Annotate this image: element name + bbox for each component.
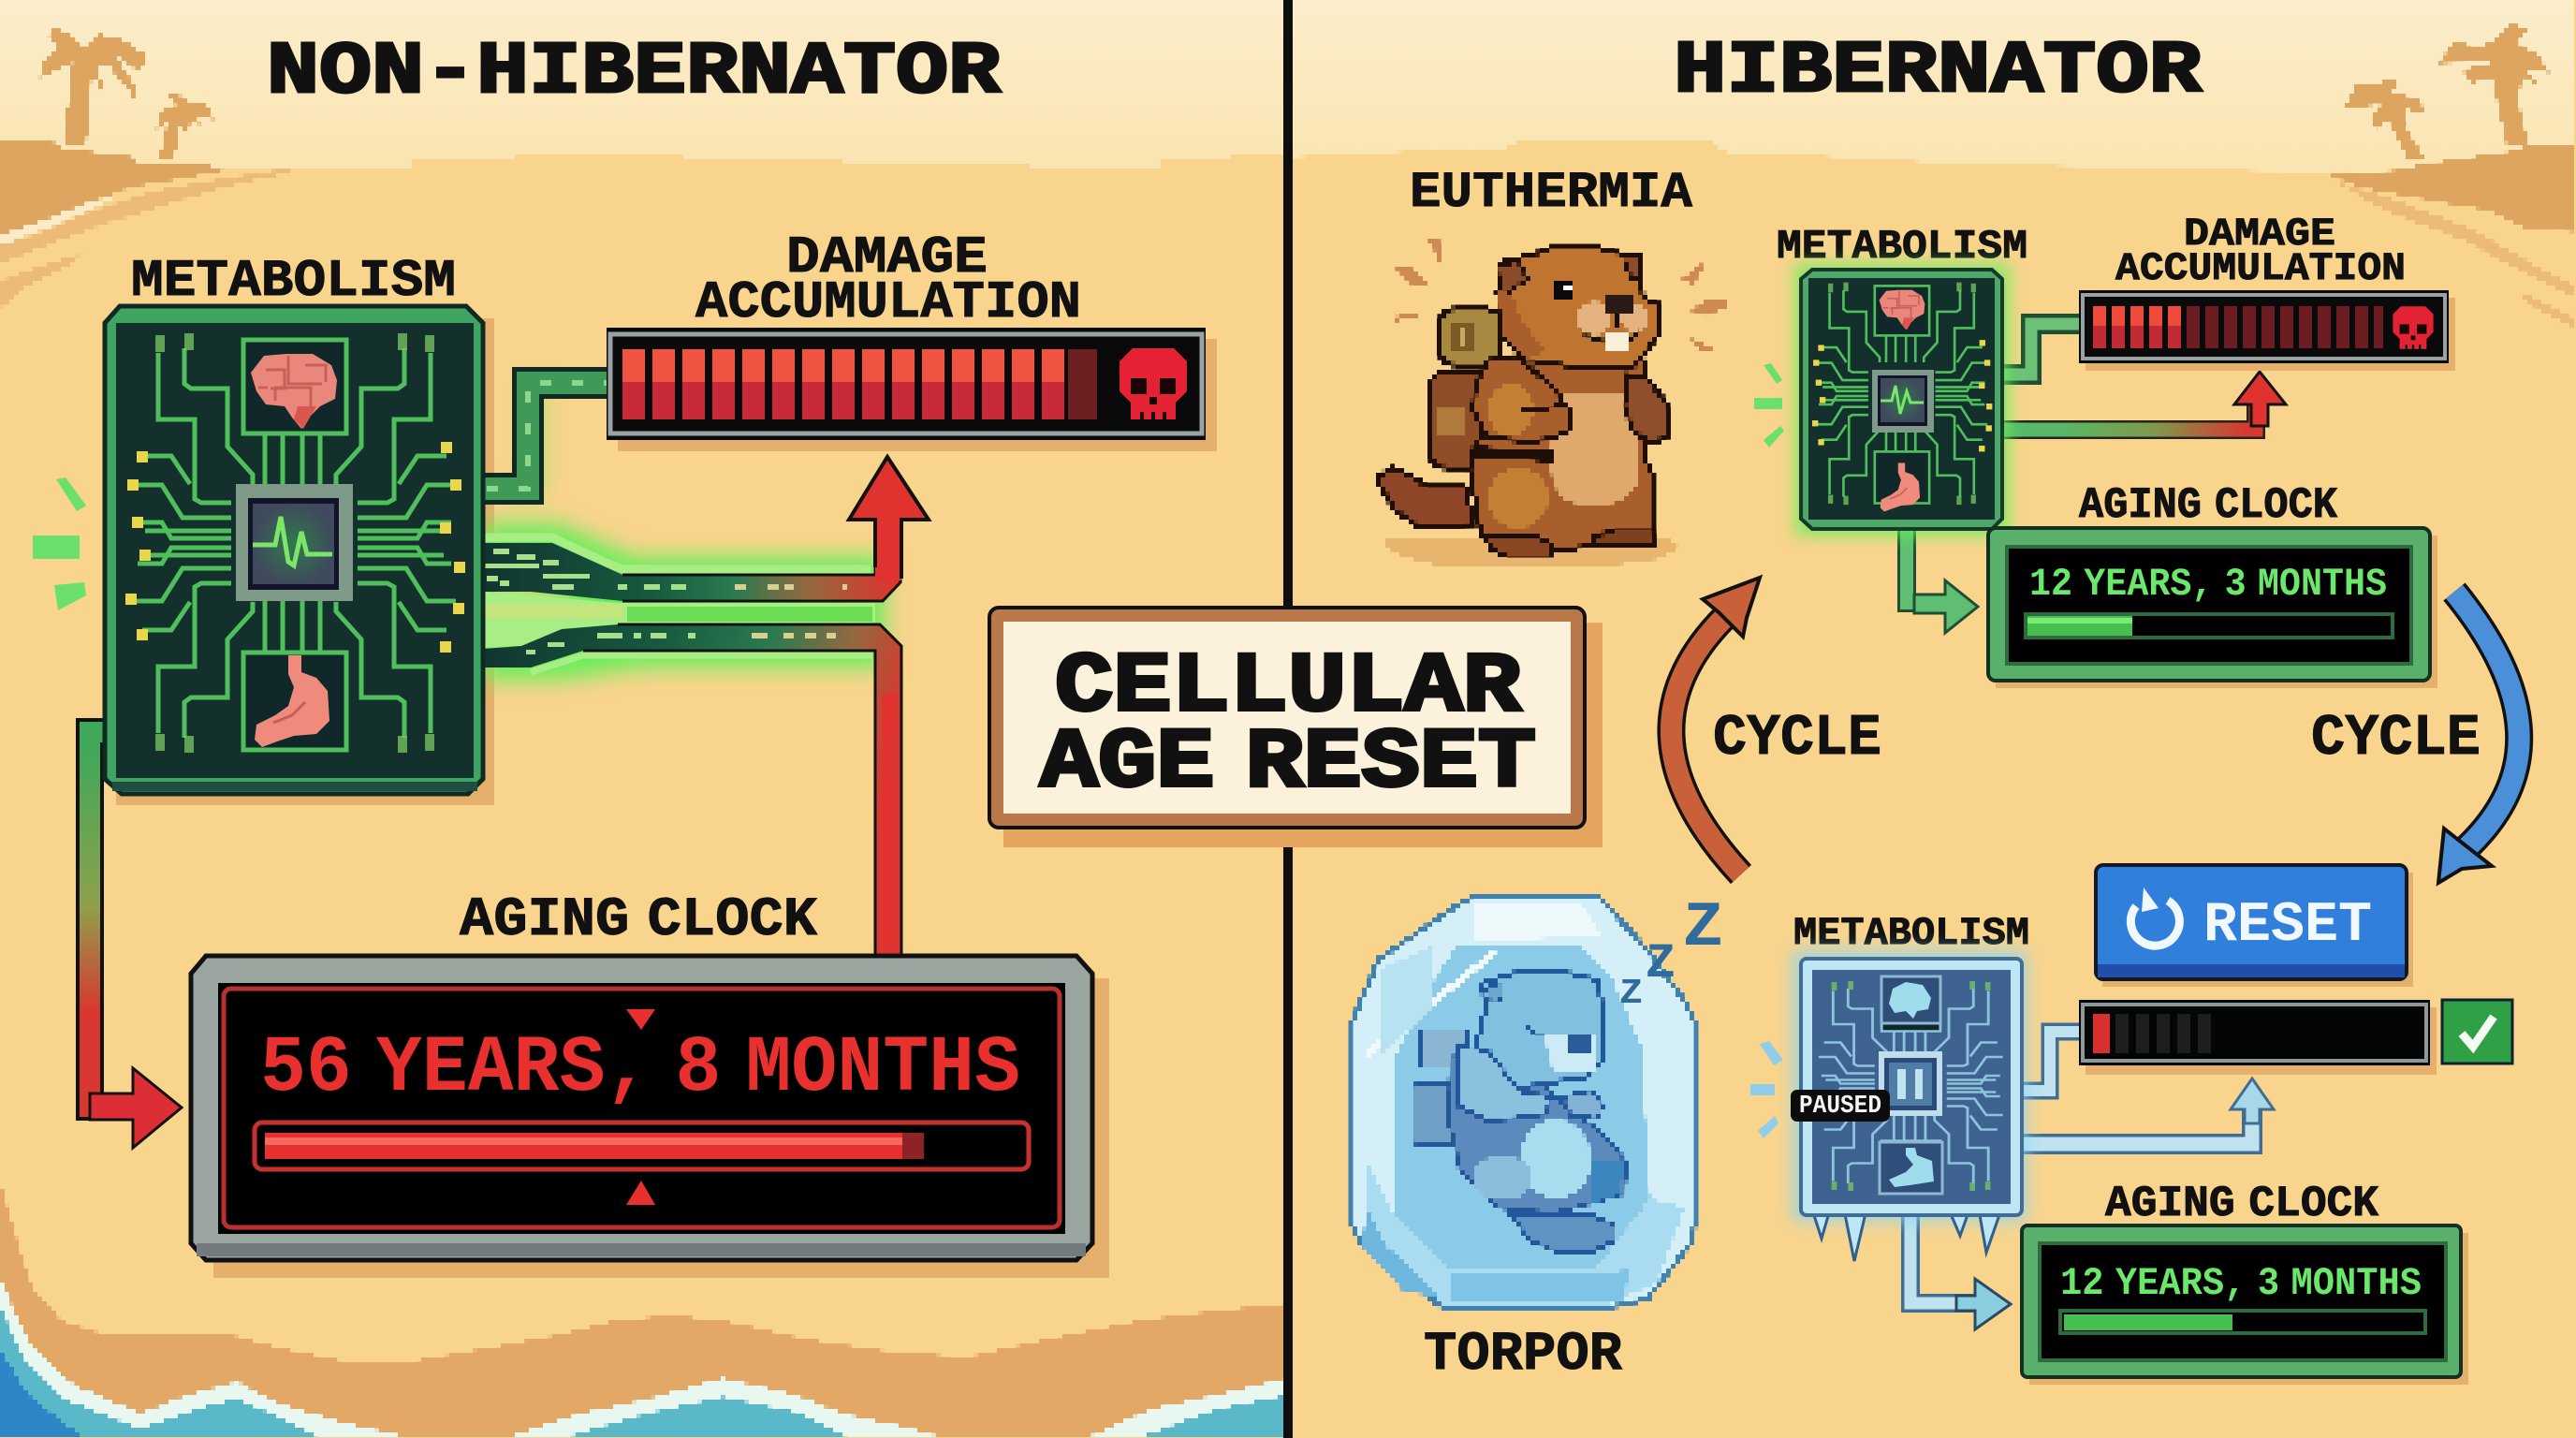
icon: brain — [251, 354, 337, 429]
label: torpor: TORPOR — [1424, 1325, 1622, 1386]
paused badge: PAUSED — [1799, 1093, 1881, 1121]
frozen backpack — [1421, 1030, 1466, 1067]
arrow: frozen metabolism flow to damage — [2012, 1078, 2274, 1144]
damage segments — [622, 349, 1064, 419]
icon: frozen stomach — [1889, 1148, 1934, 1187]
icon: stomach — [255, 655, 329, 747]
progress bar — [2060, 1311, 2425, 1333]
icicles — [1812, 1210, 2001, 1261]
panel: aging clock right top — [1988, 528, 2437, 688]
flow dashes — [483, 549, 686, 590]
arrow: right metabolism to aging clock — [1907, 529, 1978, 633]
label: aging clock right top: AGING CLOCK — [2079, 481, 2337, 530]
action ticks — [1397, 237, 1725, 353]
flow dashes — [526, 633, 695, 654]
marker triangles — [626, 1009, 655, 1205]
damage level — [2093, 1014, 2110, 1053]
arrow: metabolism to damage pipe — [483, 383, 607, 489]
callout: cellular age reset — [989, 608, 1603, 847]
arrow: frozen metabolism to aging clock — [1910, 1215, 2011, 1329]
muzzle — [1577, 301, 1611, 335]
icon: sleeping z letters: Z — [1646, 936, 1676, 991]
arrow: glow flows left — [483, 384, 885, 651]
progress bar — [255, 1123, 1029, 1169]
panel: damage bar right — [2079, 290, 2455, 371]
callout: cellular age reset: AGE RESET — [1040, 716, 1536, 812]
belly — [1550, 391, 1640, 506]
cpu chip — [236, 484, 353, 601]
heading: hibernator: HIBERNATOR — [1674, 29, 2203, 113]
panel: frozen metabolism board — [1750, 950, 2027, 1261]
feet — [1484, 536, 1550, 557]
arrow: metabolism pipe to aging clock left — [90, 732, 182, 1148]
arrow: right metabolism to damage pipe — [1998, 324, 2079, 374]
board shadow left — [116, 318, 494, 805]
frost ticks — [1750, 1041, 1783, 1138]
icon: frozen brain — [1889, 982, 1931, 1019]
label: aging clock right bottom: AGING CLOCK — [2105, 1180, 2378, 1228]
frozen paw — [1561, 1091, 1603, 1119]
bedroll — [1440, 309, 1501, 365]
label: cycle right: CYCLE — [2311, 705, 2481, 771]
icon: stomach — [1881, 463, 1920, 511]
label: damage accumulation left: ACCUMULATION — [695, 272, 1081, 332]
label: damage accumulation right: DAMAGE — [2184, 212, 2335, 257]
torso — [1470, 360, 1652, 554]
ice block — [1353, 897, 1694, 1309]
label: euthermia: EUTHERMIA — [1410, 165, 1693, 222]
heading: non-hibernator: NON-HIBERNATOR — [267, 30, 1002, 114]
label: damage accumulation right: ACCUMULATION — [2115, 246, 2406, 291]
cpu chip — [1872, 370, 1934, 433]
arrow: cycle up orange — [1671, 578, 1760, 874]
arrow: metabolism flow up to damage — [483, 457, 929, 601]
panel: metabolism board right — [1754, 264, 2009, 536]
circuit traces — [1812, 286, 1992, 504]
label: metabolism right bottom: METABOLISM — [1793, 911, 2029, 956]
panel: metabolism board left — [33, 306, 483, 794]
icon: green check — [2442, 1000, 2512, 1064]
icon: brain — [1880, 290, 1925, 330]
tail — [1376, 468, 1474, 526]
frozen circuit — [1819, 985, 2003, 1189]
frozen body — [1449, 1044, 1626, 1213]
damage segments — [2093, 306, 2181, 348]
pulse ticks — [1754, 363, 1784, 448]
icon: reset arrow — [2130, 888, 2179, 946]
right ear — [1622, 255, 1642, 279]
circuit nodes — [125, 442, 465, 653]
icon: skull — [1120, 348, 1187, 419]
empty segments — [2115, 1014, 2211, 1053]
icon: beaver frozen in ice — [1339, 885, 1713, 1320]
label: metabolism right top: METABOLISM — [1777, 224, 2027, 271]
arrow: frozen metabolism to damage pipe — [2012, 1032, 2079, 1091]
scene: left island with palms — [0, 28, 300, 309]
progress bar — [2026, 614, 2393, 638]
backpack — [1429, 372, 1486, 468]
circuit traces — [133, 340, 456, 750]
panel: aging clock right bottom — [2022, 1225, 2468, 1385]
head — [1498, 248, 1659, 367]
scene: left sky — [0, 0, 1288, 170]
button: reset — [2096, 865, 2413, 987]
label: metabolism left: METABOLISM — [131, 251, 456, 311]
clock reading: 12 YEARS, 3 MONTHS — [2029, 562, 2387, 607]
scene: right island with palms — [2327, 22, 2576, 330]
label: damage accumulation left: DAMAGE — [786, 227, 988, 287]
icon: beaver euthermia — [1357, 225, 1741, 580]
button label: RESET — [2203, 894, 2372, 958]
frozen tail — [1510, 1214, 1615, 1253]
eye — [1556, 281, 1573, 300]
near arm — [1473, 356, 1571, 442]
paused chip — [1879, 1051, 1942, 1116]
frozen arm — [1456, 1047, 1551, 1122]
icon: sleeping z letters: Z — [1619, 974, 1643, 1014]
left ear — [1498, 260, 1528, 292]
ice glow — [1793, 950, 2027, 1222]
far arm — [1624, 374, 1668, 444]
panel: damage bar reset — [2079, 1000, 2437, 1075]
clock reading: 12 YEARS, 3 MONTHS — [2060, 1261, 2422, 1306]
label: aging clock left: AGING CLOCK — [460, 890, 817, 951]
ground shadow — [1381, 536, 1680, 568]
bright band between flows — [483, 592, 875, 648]
arrow: cycle down blue — [2438, 592, 2519, 883]
divider line — [1283, 0, 1293, 1438]
belt strap — [1471, 451, 1554, 457]
scene: right sky — [1288, 0, 2576, 172]
callout text: CELLULAR — [1055, 640, 1521, 736]
pulse ticks — [33, 477, 86, 610]
scene: left beach and water — [0, 1181, 1288, 1438]
board glow — [1795, 264, 2009, 536]
icon: sleeping z letters — [1619, 892, 1723, 1014]
panel: damage accumulation bar left — [607, 328, 1217, 451]
brain bay — [1881, 976, 1940, 1023]
thigh — [1488, 468, 1548, 528]
board frame — [105, 306, 483, 794]
arrow: metabolism flow down to aging clock — [483, 624, 901, 956]
icon: sleeping z letters: Z — [1683, 892, 1723, 964]
panel: aging clock left — [191, 956, 1109, 1278]
frozen head — [1476, 972, 1603, 1089]
clock reading: 56 YEARS, 8 MONTHS — [260, 1023, 1020, 1114]
label: cycle left: CYCLE — [1713, 705, 1881, 771]
icon: skull — [2393, 306, 2434, 349]
stomach bay — [1880, 1142, 1942, 1194]
arrow: right metabolism flow to damage — [1998, 372, 2286, 430]
